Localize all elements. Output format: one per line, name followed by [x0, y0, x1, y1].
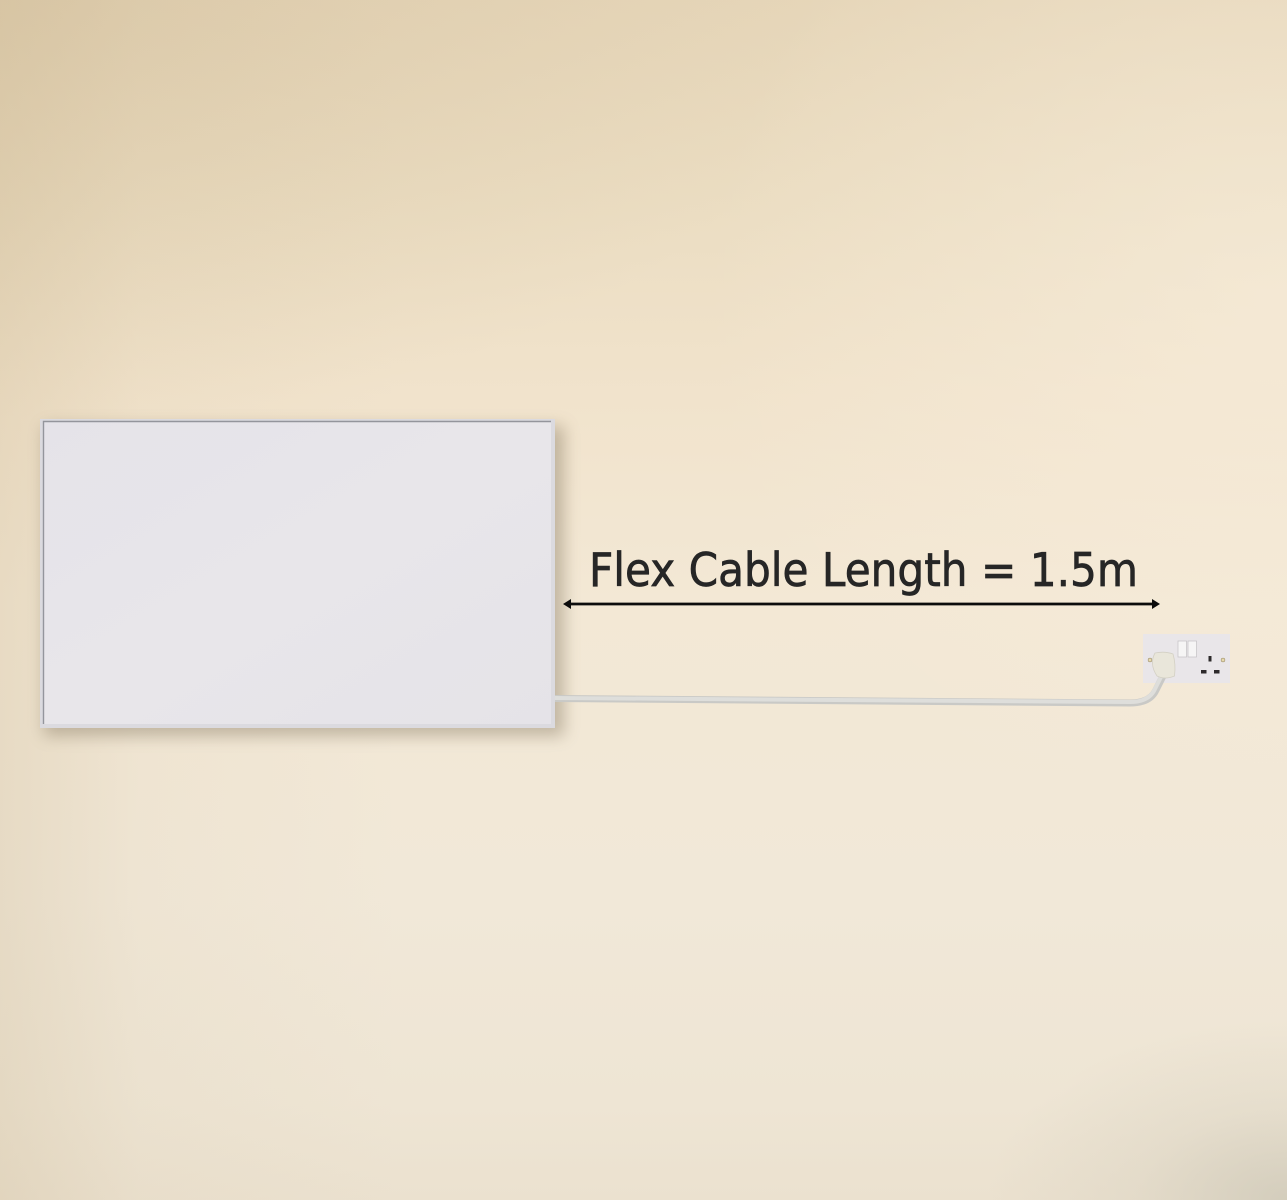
socket pin holes: [1208, 656, 1212, 662]
panel shadow: [44, 426, 564, 736]
plug: [1152, 652, 1175, 678]
panel frame: [40, 419, 555, 728]
screws: [1148, 658, 1152, 662]
flex cable: [555, 673, 1164, 703]
faceplate: [1143, 634, 1230, 683]
dimension arrow: [563, 599, 1160, 609]
panel face: [43, 422, 551, 724]
panel inner top and left edges: [44, 422, 551, 724]
heater panel: [40, 419, 564, 736]
cable length label: Flex Cable Length = 1.5m: [589, 543, 1138, 597]
socket: [1143, 634, 1230, 683]
switches: [1178, 641, 1186, 657]
